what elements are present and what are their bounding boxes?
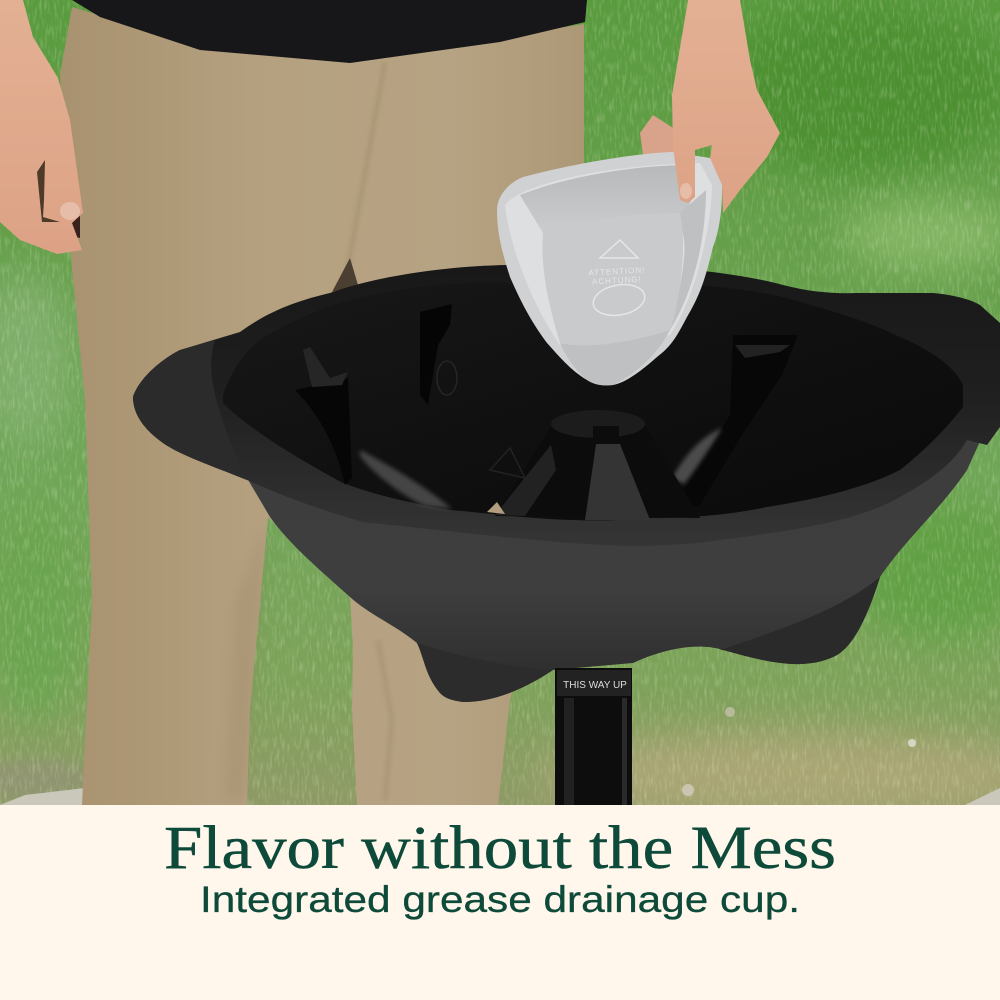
- black t-shirt hem: [72, 0, 587, 63]
- grill bowl rim and handles: [133, 264, 1000, 546]
- hand fingers behind cup: [640, 115, 680, 155]
- grease drainage cup: ACHTUNG!: [592, 275, 642, 286]
- left hand: [0, 0, 83, 254]
- grill bowl underside with feet: [247, 413, 993, 702]
- bowl interior: [223, 282, 963, 520]
- trousers: [60, 7, 584, 805]
- grill support pole with label: THIS WAY UP: [563, 680, 627, 691]
- grease drainage cup: ATTENTION!: [588, 266, 646, 277]
- grease drainage cup: [497, 152, 722, 385]
- subheading: Integrated grease drainage cup.: [200, 879, 800, 920]
- grill support pole with label: [555, 668, 632, 805]
- right hand holding cup: [672, 0, 780, 213]
- bowl interior moulded details: [295, 304, 798, 520]
- heading: Flavor without the Mess: [164, 815, 836, 882]
- caption band: [0, 805, 1000, 1000]
